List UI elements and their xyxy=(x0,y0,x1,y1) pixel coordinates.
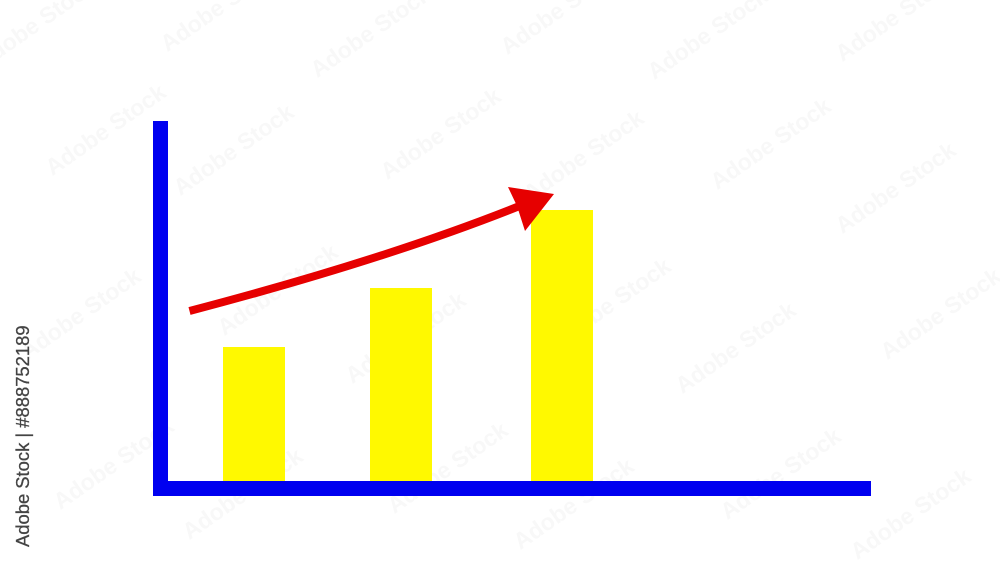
watermark pattern: Adobe Stock xyxy=(830,136,961,238)
watermark pattern: Adobe Stock xyxy=(545,252,676,354)
watermark pattern: Adobe Stock xyxy=(177,442,308,544)
watermark pattern: Adobe Stock xyxy=(705,92,836,194)
watermark pattern: Adobe Stock xyxy=(670,296,801,398)
watermark pattern: Adobe Stock xyxy=(382,416,513,518)
watermark pattern: Adobe Stock xyxy=(212,238,343,340)
watermark pattern: Adobe Stock xyxy=(48,412,179,514)
watermark pattern: Adobe Stock xyxy=(518,104,649,206)
stock id text: Adobe Stock | #888752189 xyxy=(12,325,33,547)
bar 3 xyxy=(531,210,593,481)
watermark pattern: Adobe Stock xyxy=(375,82,506,184)
watermark pattern: Adobe Stock xyxy=(340,286,471,388)
chart axes xyxy=(153,121,871,496)
watermark pattern: Adobe Stock xyxy=(15,262,146,364)
red rising arrow xyxy=(190,187,554,311)
watermark pattern: Adobe Stock xyxy=(40,78,171,180)
watermark pattern: Adobe Stock xyxy=(508,452,639,554)
bar 2 xyxy=(370,288,432,481)
bar 1 xyxy=(223,347,285,481)
watermark pattern: Adobe Stock xyxy=(715,422,846,524)
watermark pattern: Adobe Stock xyxy=(845,462,976,562)
watermark pattern: Adobe Stock xyxy=(168,98,299,200)
